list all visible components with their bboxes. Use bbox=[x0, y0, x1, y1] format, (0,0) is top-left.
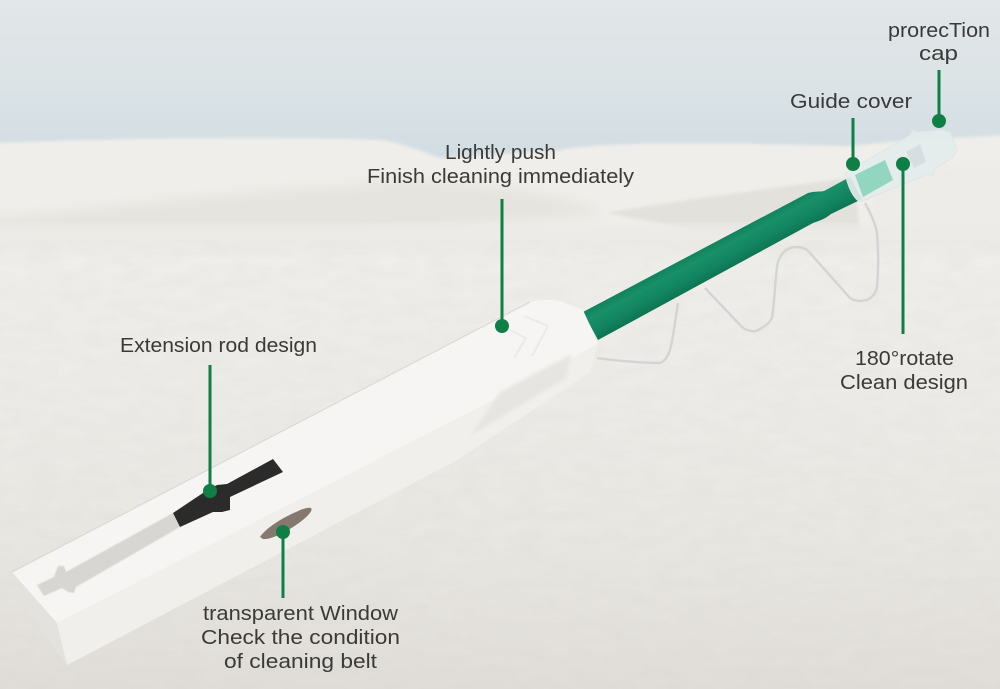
callout: lightly push: Lightly push bbox=[445, 141, 556, 164]
callout: protection cap: cap bbox=[919, 42, 958, 65]
transparent window bbox=[260, 508, 312, 539]
callout: protection cap bbox=[888, 19, 990, 128]
callout: transparent window: of cleaning belt bbox=[224, 650, 377, 673]
callout: transparent window bbox=[201, 525, 400, 673]
callout: protection cap: prorecTion bbox=[888, 19, 990, 42]
callout: 180 degree rotate: 180°rotate bbox=[855, 347, 954, 370]
callout: lightly push: Finish cleaning immediately bbox=[367, 165, 635, 188]
callout: transparent window: Check the condition bbox=[201, 626, 400, 649]
retaining wire bbox=[597, 203, 878, 363]
callout: extension rod design: Extension rod design bbox=[120, 334, 317, 357]
slot bbox=[37, 513, 180, 596]
callout: lightly push bbox=[367, 141, 635, 333]
cleaning pen bbox=[12, 130, 957, 665]
callout: guide cover bbox=[790, 90, 912, 171]
callout: extension rod design bbox=[120, 334, 317, 498]
callout: transparent window: transparent Window bbox=[203, 602, 398, 625]
callout: 180 degree rotate: Clean design bbox=[840, 371, 968, 394]
green tube bbox=[583, 177, 862, 340]
protection cap and guide cover bbox=[845, 130, 957, 202]
white pen body bbox=[12, 300, 598, 665]
callout: guide cover: Guide cover bbox=[790, 90, 912, 113]
extension rod bbox=[173, 459, 283, 527]
callout: 180 degree rotate bbox=[840, 157, 968, 394]
